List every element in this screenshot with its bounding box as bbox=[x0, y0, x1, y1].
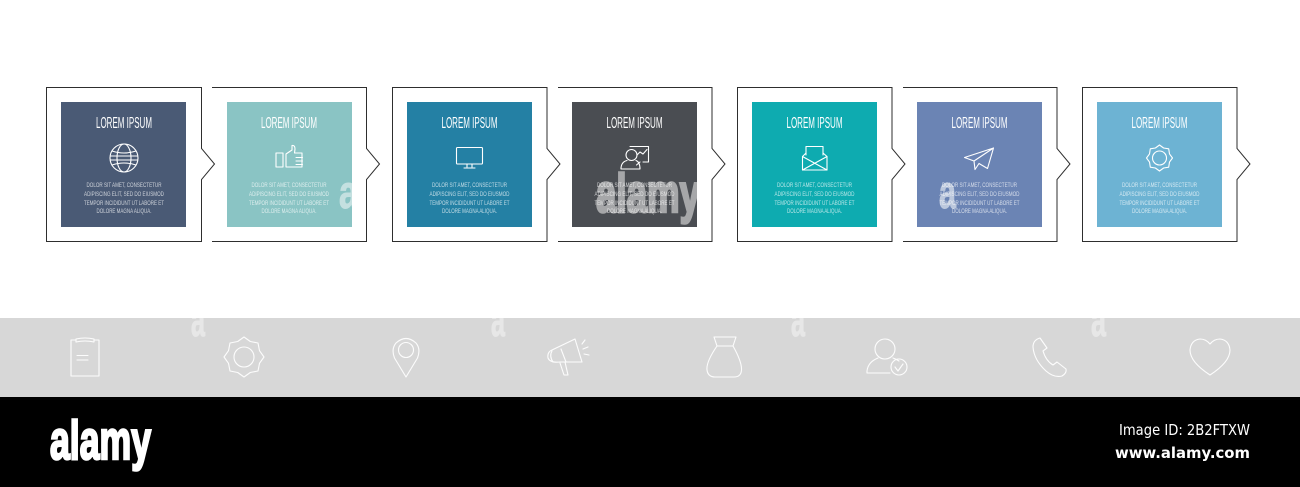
body text 7: DOLORE MAGNA ALIQUA. bbox=[1132, 208, 1187, 215]
watermark letter 2: a bbox=[339, 166, 358, 218]
frame with arrow 6 bbox=[903, 88, 1070, 242]
heading 4: LOREM IPSUM bbox=[606, 115, 662, 132]
band watermark letters: a bbox=[791, 294, 805, 346]
heading 6: LOREM IPSUM bbox=[952, 115, 1008, 132]
body text 5: ADIPISCING ELIT, SED DO EIUSMOD bbox=[774, 191, 855, 198]
square 2 bbox=[227, 102, 352, 227]
square 7 bbox=[1097, 102, 1222, 227]
icon: thumbs up bbox=[276, 145, 302, 167]
icon: paper plane bbox=[964, 148, 994, 170]
body text 4: DOLORE MAGNA ALIQUA. bbox=[607, 208, 662, 215]
body text 5: DOLOR SIT AMET, CONSECTETUR bbox=[777, 182, 852, 189]
icon: clipboard bbox=[71, 338, 99, 376]
body text 1: ADIPISCING ELIT, SED DO EIUSMOD bbox=[84, 191, 164, 198]
body text 7 bbox=[1120, 182, 1200, 215]
body text 1: TEMPOR INCIDIDUNT UT LABORE ET bbox=[84, 200, 164, 207]
body text 5: DOLORE MAGNA ALIQUA. bbox=[787, 208, 842, 215]
frame with arrow 2 bbox=[212, 88, 380, 242]
icon: presenter with chart bbox=[621, 146, 648, 169]
frame with arrow 7 bbox=[1082, 88, 1250, 242]
icon: user with check bbox=[867, 339, 907, 375]
frame with arrow 1 bbox=[46, 88, 214, 242]
icon: globe bbox=[110, 144, 138, 172]
heading 7: LOREM IPSUM bbox=[1132, 115, 1188, 132]
panel: grey icon band bbox=[0, 318, 1300, 397]
icon: gear bbox=[224, 337, 264, 377]
band watermark letters: a bbox=[191, 294, 205, 346]
square 5 bbox=[752, 102, 877, 227]
website: www.alamy.com bbox=[1115, 444, 1250, 462]
band background bbox=[0, 318, 1300, 397]
frame with arrow 3 bbox=[392, 88, 560, 242]
watermark letter 6: a bbox=[939, 166, 956, 218]
panel: step 2 bbox=[212, 88, 380, 242]
heading 1: LOREM IPSUM bbox=[96, 115, 152, 132]
body text 2: DOLORE MAGNA ALIQUA. bbox=[262, 208, 317, 215]
alamy logo: alamy bbox=[50, 409, 151, 471]
body text 3 bbox=[430, 182, 510, 215]
square 3 bbox=[407, 102, 532, 227]
body text 3: ADIPISCING ELIT, SED DO EIUSMOD bbox=[430, 191, 510, 198]
icon: telephone bbox=[1033, 338, 1066, 376]
body text 1 bbox=[84, 182, 164, 215]
body text 6: ADIPISCING ELIT, SED DO EIUSMOD bbox=[940, 191, 1020, 198]
body text 5: TEMPOR INCIDIDUNT UT LABORE ET bbox=[774, 200, 854, 207]
panel: step 4 bbox=[558, 88, 725, 242]
body text 4: DOLOR SIT AMET, CONSECTETUR bbox=[597, 182, 672, 189]
panel: step 1 bbox=[46, 88, 214, 242]
panel: black footer bbox=[0, 397, 1300, 487]
panel: step 6 bbox=[903, 88, 1070, 242]
icon: heart bbox=[1190, 339, 1230, 375]
square 6 bbox=[917, 102, 1042, 227]
body text 4 bbox=[594, 182, 675, 215]
watermark logo on square 4: alamy bbox=[596, 162, 700, 224]
icon: megaphone bbox=[548, 339, 589, 375]
body text 3: DOLORE MAGNA ALIQUA. bbox=[442, 208, 497, 215]
body text 1: DOLORE MAGNA ALIQUA. bbox=[96, 208, 152, 215]
frame with arrow 5 bbox=[738, 88, 905, 242]
square 4 bbox=[572, 102, 697, 227]
icon: monitor bbox=[456, 148, 482, 168]
body text 6: DOLORE MAGNA ALIQUA. bbox=[952, 208, 1007, 215]
icon: open envelope bbox=[802, 146, 827, 170]
body text 3: DOLOR SIT AMET, CONSECTETUR bbox=[432, 182, 507, 189]
body text 6 bbox=[940, 182, 1020, 215]
frame with arrow 4 bbox=[558, 88, 725, 242]
icon: gear bbox=[1146, 145, 1172, 171]
icon: map pin bbox=[393, 338, 419, 377]
square 1 bbox=[61, 102, 186, 227]
heading 2: LOREM IPSUM bbox=[261, 115, 317, 132]
image id: Image ID: 2B2FTXW bbox=[1119, 421, 1250, 439]
body text 3: TEMPOR INCIDIDUNT UT LABORE ET bbox=[430, 200, 510, 207]
body text 6: TEMPOR INCIDIDUNT UT LABORE ET bbox=[940, 200, 1020, 207]
band watermark letters: a bbox=[491, 294, 505, 346]
body text 2: DOLOR SIT AMET, CONSECTETUR bbox=[252, 182, 327, 189]
body text 7: TEMPOR INCIDIDUNT UT LABORE ET bbox=[1120, 200, 1200, 207]
body text 4: TEMPOR INCIDIDUNT UT LABORE ET bbox=[594, 200, 674, 207]
body text 4: ADIPISCING ELIT, SED DO EIUSMOD bbox=[594, 191, 675, 198]
body text 2 bbox=[249, 182, 329, 215]
heading 3: LOREM IPSUM bbox=[442, 115, 498, 132]
panel: step 3 bbox=[392, 88, 560, 242]
body text 1: DOLOR SIT AMET, CONSECTETUR bbox=[86, 182, 162, 189]
body text 2: TEMPOR INCIDIDUNT UT LABORE ET bbox=[249, 200, 329, 207]
band watermark letters bbox=[192, 318, 1106, 337]
body text 7: ADIPISCING ELIT, SED DO EIUSMOD bbox=[1120, 191, 1200, 198]
body text 7: DOLOR SIT AMET, CONSECTETUR bbox=[1122, 182, 1197, 189]
panel: step 7 bbox=[1082, 88, 1250, 242]
footer background bbox=[0, 397, 1300, 487]
body text 6: DOLOR SIT AMET, CONSECTETUR bbox=[942, 182, 1017, 189]
body text 2: ADIPISCING ELIT, SED DO EIUSMOD bbox=[249, 191, 329, 198]
panel: step 5 bbox=[738, 88, 905, 242]
icon: money bag bbox=[707, 337, 742, 377]
heading 5: LOREM IPSUM bbox=[786, 115, 842, 132]
band watermark letters: a bbox=[1091, 294, 1106, 346]
body text 5 bbox=[774, 182, 855, 215]
